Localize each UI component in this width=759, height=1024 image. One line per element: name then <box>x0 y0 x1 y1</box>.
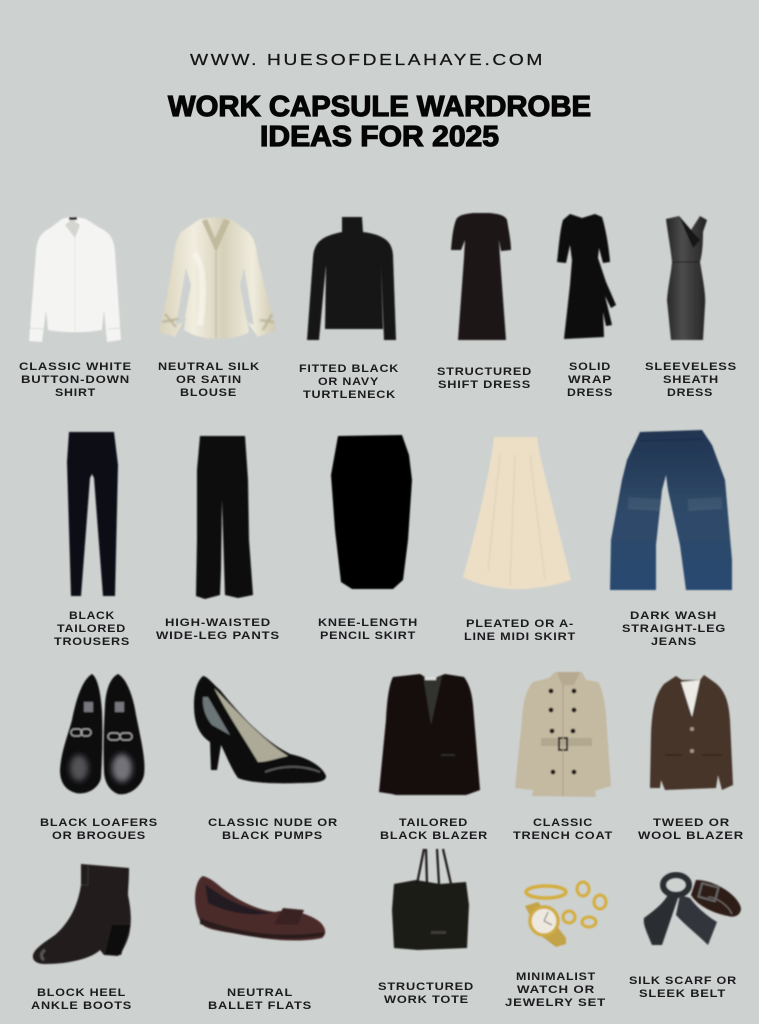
icon: high-waisted wide-leg pants <box>196 436 253 599</box>
label: black loafers or brogues: OR BROGUES <box>52 830 146 842</box>
label: fitted black or navy turtleneck: FITTED BLACK <box>299 363 399 375</box>
label: black loafers or brogues <box>40 817 158 842</box>
label: minimalist watch or jewelry set: JEWELRY SET <box>505 997 606 1009</box>
icon: sleeveless sheath dress <box>666 216 707 340</box>
label: neutral ballet flats: NEUTRAL <box>227 987 293 999</box>
label: black tailored trousers: TAILORED <box>57 623 126 635</box>
label: block heel ankle boots <box>31 987 132 1012</box>
label: fitted black or navy turtleneck: TURTLENECK <box>303 389 396 401</box>
label: solid wrap dress: DRESS <box>567 387 613 399</box>
icon: silk scarf and sleek belt <box>644 875 741 945</box>
panel: accessories row <box>33 849 741 964</box>
label: pleated or a-line midi skirt <box>464 618 576 643</box>
title: WORK CAPSULE WARDROBE <box>168 91 591 123</box>
label: classic white button-down shirt: BUTTON-DOWN <box>21 374 130 386</box>
label: minimalist watch or jewelry set: WATCH OR <box>517 984 595 996</box>
label: fitted black or navy turtleneck <box>299 363 399 401</box>
label: sleeveless sheath dress: SHEATH <box>663 374 719 386</box>
label: neutral silk or satin blouse: BLOUSE <box>180 387 237 399</box>
icon: black patent pumps <box>194 676 326 783</box>
label: structured work tote: WORK TOTE <box>384 994 469 1006</box>
panel: item labels <box>19 361 744 1012</box>
title: IDEAS FOR 2025 <box>260 121 499 153</box>
label: dark wash straight-leg jeans: JEANS <box>651 636 697 648</box>
icon: dark wash jeans <box>610 430 732 590</box>
label: neutral silk or satin blouse: NEUTRAL SILK <box>158 361 260 373</box>
icon: tailored black blazer <box>379 674 480 795</box>
panel: bottoms row <box>67 430 732 599</box>
label: sleeveless sheath dress <box>645 361 737 399</box>
label: sleeveless sheath dress: SLEEVELESS <box>645 361 737 373</box>
label: black tailored trousers: BLACK <box>69 610 115 622</box>
icon: silk blouse <box>159 217 276 339</box>
label: tailored black blazer: TAILORED <box>399 817 468 829</box>
icon: black tailored trousers <box>67 432 118 596</box>
label: solid wrap dress: WRAP <box>568 374 612 386</box>
label: black tailored trousers: TROUSERS <box>54 636 130 648</box>
panel: shoes and jackets row <box>60 672 733 797</box>
icon: black loafers <box>60 674 144 794</box>
label: black loafers or brogues: BLACK LOAFERS <box>40 817 158 829</box>
label: knee-length pencil skirt: PENCIL SKIRT <box>320 630 416 642</box>
icon: solid wrap dress <box>557 214 616 339</box>
label: pleated or a-line midi skirt: PLEATED OR A- <box>466 618 574 630</box>
panel: tops and dresses row <box>29 213 707 342</box>
label: neutral silk or satin blouse <box>158 361 260 399</box>
label: high-waisted wide-leg pants: HIGH-WAISTED <box>165 617 271 629</box>
label: neutral ballet flats <box>208 987 312 1012</box>
website url: WWW. HUESOFDELAHAYE.COM <box>190 52 545 69</box>
icon: classic trench coat <box>515 672 611 797</box>
label: silk scarf or sleek belt: SLEEK BELT <box>639 988 726 1000</box>
icon: tweed wool blazer <box>650 675 733 790</box>
title <box>168 91 591 153</box>
icon: structured black tote <box>392 849 469 950</box>
label: neutral ballet flats: BALLET FLATS <box>208 1000 312 1012</box>
label: tweed or wool blazer <box>638 817 744 842</box>
label: classic nude or black pumps <box>208 817 338 842</box>
label: tweed or wool blazer: WOOL BLAZER <box>638 830 744 842</box>
label: high-waisted wide-leg pants <box>156 617 280 642</box>
label: solid wrap dress <box>567 361 613 399</box>
icon: structured shift dress <box>451 213 511 340</box>
label: minimalist watch or jewelry set: MINIMALIST <box>516 971 596 983</box>
label: classic trench coat: CLASSIC <box>533 817 593 829</box>
label: neutral silk or satin blouse: OR SATIN <box>176 374 242 386</box>
label: structured shift dress <box>437 366 532 391</box>
label: classic white button-down shirt: SHIRT <box>55 387 96 399</box>
label: dark wash straight-leg jeans <box>622 610 726 648</box>
label: fitted black or navy turtleneck: OR NAVY <box>318 376 379 388</box>
label: classic trench coat <box>513 817 613 842</box>
icon: cream midi skirt <box>463 437 571 589</box>
label: high-waisted wide-leg pants: WIDE-LEG PANTS <box>156 630 280 642</box>
icon: gold watch and jewelry set <box>525 882 606 947</box>
label: pleated or a-line midi skirt: LINE MIDI SKIRT <box>464 631 576 643</box>
label: dark wash straight-leg jeans: STRAIGHT-LEG <box>622 623 726 635</box>
icon: block heel ankle boots <box>33 864 131 964</box>
label: dark wash straight-leg jeans: DARK WASH <box>630 610 717 622</box>
icon: brown ballet flats <box>195 876 325 941</box>
label: classic white button-down shirt: CLASSIC WHITE <box>19 361 132 373</box>
label: sleeveless sheath dress: DRESS <box>667 387 713 399</box>
label: tailored black blazer: BLACK BLAZER <box>380 830 488 842</box>
label: block heel ankle boots: ANKLE BOOTS <box>31 1000 132 1012</box>
label: classic trench coat: TRENCH COAT <box>513 830 613 842</box>
label: block heel ankle boots: BLOCK HEEL <box>37 987 126 999</box>
label: silk scarf or sleek belt: SILK SCARF OR <box>629 975 737 987</box>
label: classic white button-down shirt <box>19 361 132 399</box>
label: structured shift dress: SHIFT DRESS <box>438 379 531 391</box>
icon: white button-down shirt <box>29 216 121 342</box>
label: structured work tote <box>378 981 474 1006</box>
label: classic nude or black pumps: BLACK PUMPS <box>222 830 323 842</box>
label: knee-length pencil skirt <box>318 617 418 642</box>
label: structured shift dress: STRUCTURED <box>437 366 532 378</box>
label: black tailored trousers <box>54 610 130 648</box>
label: solid wrap dress: SOLID <box>569 361 611 373</box>
label: tweed or wool blazer: TWEED OR <box>653 817 730 829</box>
label: tailored black blazer <box>380 817 488 842</box>
label: classic nude or black pumps: CLASSIC NUDE OR <box>208 817 338 829</box>
label: minimalist watch or jewelry set <box>505 971 606 1009</box>
label: silk scarf or sleek belt <box>629 975 737 1000</box>
label: structured work tote: STRUCTURED <box>378 981 474 993</box>
icon: black pencil skirt <box>331 435 412 589</box>
icon: black turtleneck <box>307 217 396 340</box>
label: knee-length pencil skirt: KNEE-LENGTH <box>318 617 418 629</box>
